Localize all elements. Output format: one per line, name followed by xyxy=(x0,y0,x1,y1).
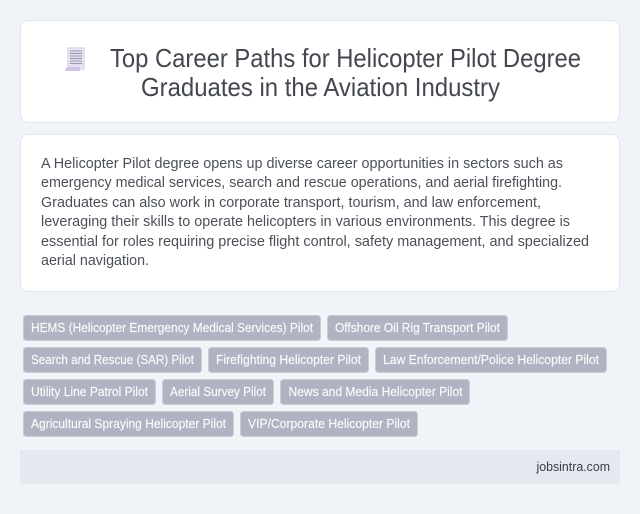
tag: news and media xyxy=(280,380,470,404)
tag: aerial survey xyxy=(162,380,274,404)
tag: agricultural xyxy=(24,412,234,436)
tag: agricultural: Agricultural Spraying Helicopter Pilot xyxy=(31,416,226,431)
panel: description xyxy=(20,134,620,292)
tag: search and rescue: Search and Rescue (SAR) Pilot xyxy=(31,352,194,367)
tag: law enforcement xyxy=(376,348,606,372)
text block: description: essential for roles requiring precise flight control, safety management, and specialized xyxy=(41,233,589,250)
tag: VIP/corporate: VIP/Corporate Helicopter Pilot xyxy=(248,416,410,431)
tag: offshore xyxy=(328,316,508,340)
text block: description: Graduates can also work in corporate transport, tourism, and law enforcement, xyxy=(41,194,541,211)
tag: HEMS: HEMS (Helicopter Emergency Medical Services) Pilot xyxy=(31,320,313,335)
text block: description xyxy=(41,155,589,269)
tag: utility line xyxy=(24,380,156,404)
tag: HEMS xyxy=(24,316,320,340)
tag: utility line: Utility Line Patrol Pilot xyxy=(31,384,148,399)
tag: VIP/corporate xyxy=(240,412,418,436)
text block: description: aerial navigation. xyxy=(41,252,149,269)
icon: document scroll xyxy=(65,47,85,71)
tag: search and rescue xyxy=(24,348,202,372)
tag: firefighting xyxy=(208,348,368,372)
footer xyxy=(20,450,620,484)
tag: law enforcement: Law Enforcement/Police Helicopter Pilot xyxy=(383,352,599,367)
text block: description: emergency medical services, search and rescue operations, and aerial firefighting. xyxy=(41,174,562,191)
heading xyxy=(110,43,581,102)
heading: Top Career Paths for Helicopter Pilot Degree xyxy=(110,43,581,73)
tag list xyxy=(24,316,606,436)
tag: firefighting: Firefighting Helicopter Pilot xyxy=(216,352,361,367)
footer credit: jobsintra.com xyxy=(536,459,610,474)
heading: Graduates in the Aviation Industry xyxy=(141,72,500,102)
text block: description: leveraging their skills to operate helicopters in various environments. This degree is xyxy=(41,213,570,230)
tag: news and media: News and Media Helicopter Pilot xyxy=(288,384,463,399)
panel: title header xyxy=(20,20,620,122)
tag: offshore: Offshore Oil Rig Transport Pilot xyxy=(335,320,500,335)
tag: aerial survey: Aerial Survey Pilot xyxy=(170,384,266,399)
text block: description: A Helicopter Pilot degree opens up diverse career opportunities in sectors such as xyxy=(41,155,563,172)
